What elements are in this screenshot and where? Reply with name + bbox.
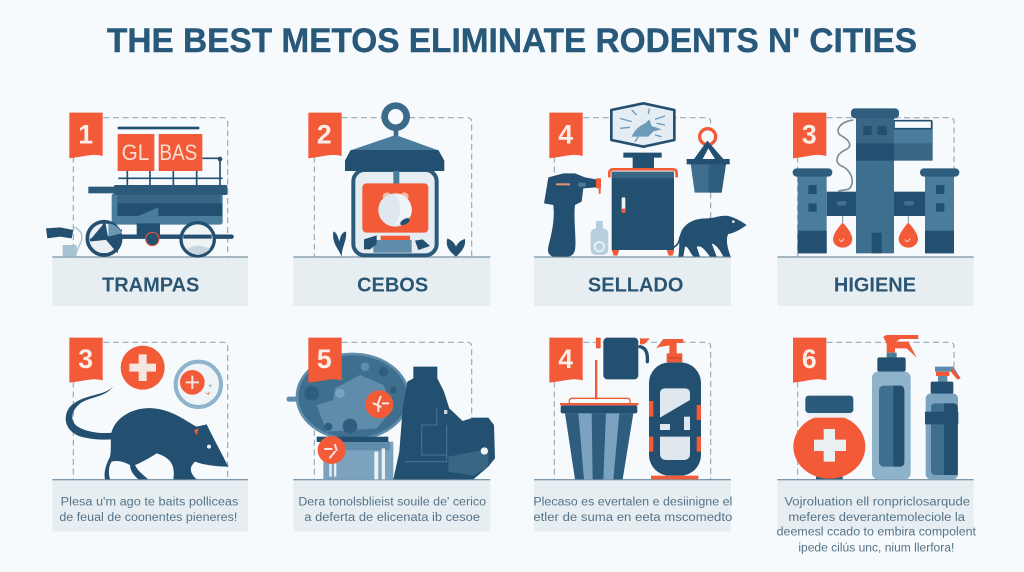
- label bar: cebos: [293, 256, 490, 306]
- icon: dark machine: [393, 367, 495, 479]
- description bar 2: a deferta de elicenata ib cesoe: [304, 510, 480, 524]
- panel: cebos: [293, 106, 490, 306]
- icon: small bottle: [591, 221, 608, 255]
- badge: 6: [793, 338, 826, 383]
- icon: factory towers: [793, 108, 959, 253]
- description bar 1: Plesa u'm ago te baits polliceas: [61, 495, 238, 509]
- icon: medicine jar: [793, 396, 865, 479]
- panel: bin with text: [533, 338, 732, 531]
- badge: 4: 4: [558, 344, 573, 374]
- badge: 4: 4: [558, 120, 573, 150]
- icon: spray bottle: [649, 339, 701, 479]
- panel: trampas: [46, 113, 248, 306]
- badge: 2: 2: [317, 120, 332, 150]
- description bar 4: ipede cilús unc, nium llerfora!: [798, 540, 954, 554]
- badge: 5: 5: [317, 344, 332, 374]
- badge: 2: [308, 113, 342, 158]
- icon: cabinet: [609, 169, 677, 256]
- panel: sellado: [534, 103, 747, 306]
- icon: hanging bucket: [687, 129, 730, 193]
- badge: 3: 3: [802, 120, 817, 150]
- label bar: higiene: HIGIENE: [834, 274, 916, 296]
- icon: orange badge bottom: [318, 436, 346, 464]
- badge: 5: [308, 338, 342, 383]
- label bar: trampas: [52, 256, 248, 306]
- icon: magnifier plus: [176, 362, 221, 407]
- icon: bait station: [333, 106, 465, 257]
- badge: 4: [549, 113, 583, 158]
- description bar 3: [533, 479, 732, 531]
- label bar: sellado: SELLADO: [588, 274, 683, 296]
- icon: trash bin: [560, 360, 638, 479]
- icon: plus circle: [121, 346, 165, 390]
- icon: filter jar: [287, 354, 408, 479]
- description bar 4: [777, 479, 977, 554]
- icon: cup: [596, 338, 650, 379]
- icon: cart trap: GL: [122, 140, 149, 165]
- badge: 3: [69, 338, 103, 383]
- badge: 3: [793, 113, 826, 158]
- title: THE BEST METOS ELIMINATE RODENTS N' CITIES: [107, 22, 917, 60]
- panel: machine with text: [287, 338, 495, 531]
- panel: rat with text: [52, 338, 248, 531]
- icon: large rat: [66, 386, 228, 479]
- icon: tall bottle: [872, 335, 918, 479]
- icon: orange badge top: [365, 390, 393, 418]
- description bar 4: deemesl ccado to embira compolent: [777, 525, 977, 539]
- panel: bottles with text: [777, 335, 977, 554]
- badge: 4: [549, 338, 583, 383]
- badge: 6: 6: [802, 344, 817, 374]
- icon: rat: [674, 216, 747, 257]
- description bar 2: [293, 479, 490, 531]
- icon: cart trap: [46, 127, 232, 257]
- icon: small bottle: [925, 367, 961, 479]
- label bar: higiene: [777, 256, 974, 306]
- badge: 3: 3: [78, 344, 93, 374]
- description bar 2: Dera tonolsblieist souile de' cerico: [298, 495, 486, 509]
- panel: higiene: [777, 108, 974, 306]
- description bar 4: Vojroluation ell ronpriclosarqude: [784, 495, 970, 509]
- label bar: cebos: CEBOS: [357, 274, 428, 296]
- badge: 1: [69, 113, 103, 158]
- description bar 1: de feual de coonentes pieneres!: [59, 510, 237, 524]
- label bar: sellado: [534, 256, 731, 306]
- description bar 4: meferes deverantemoleciole la: [788, 510, 965, 524]
- description bar 1: [52, 479, 248, 531]
- description bar 3: Plecaso es evertalen e desiinigne el: [533, 495, 732, 509]
- badge: 1: 1: [78, 120, 93, 150]
- icon: sealant gun: [544, 173, 601, 257]
- icon: monitor: [611, 103, 674, 168]
- icon: cart trap: BAS: [159, 140, 197, 165]
- description bar 3: etler de suma en eeta mscomedto: [533, 510, 732, 524]
- label bar: trampas: TRAMPAS: [102, 274, 199, 296]
